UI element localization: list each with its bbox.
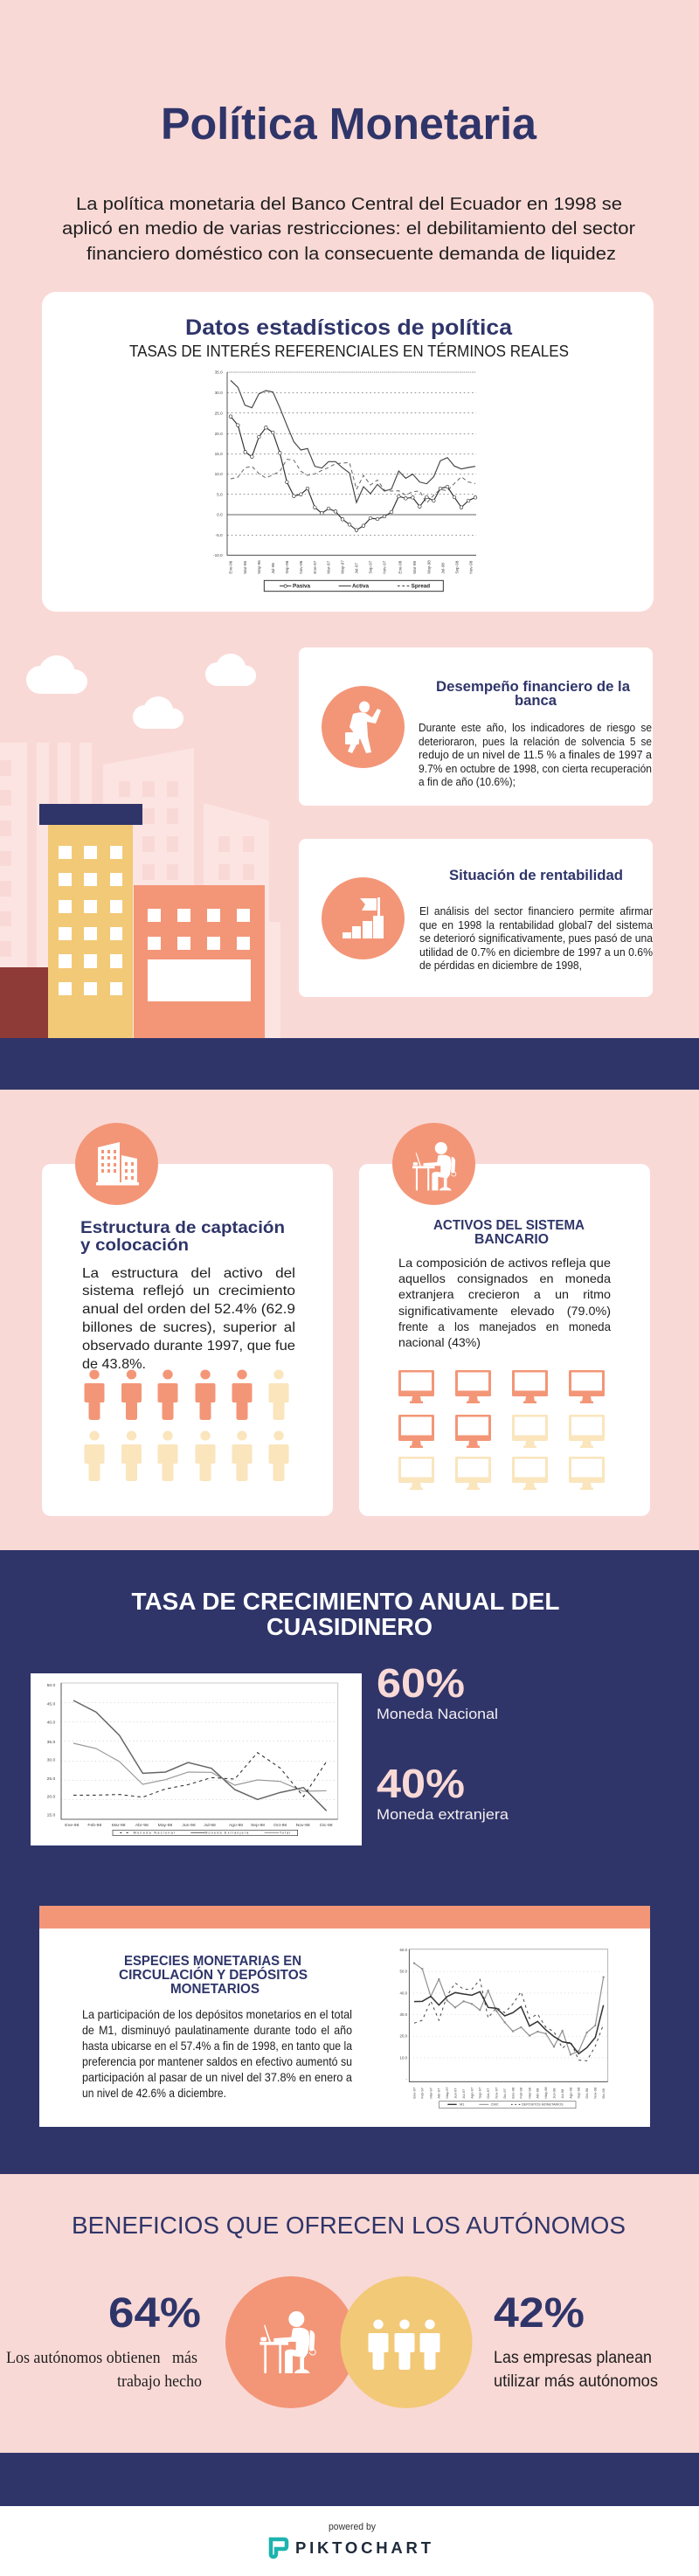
section: navy background — [0, 1550, 699, 2174]
heading: desempeño: banca — [515, 693, 557, 709]
text: estructura: La estructura del activo del — [82, 1266, 295, 1281]
footer: powered by piktochart: PIKTOCHART — [295, 2538, 432, 2557]
line chart: cuasidinero: Moneda Extranjera — [204, 1832, 249, 1835]
text: activos: significativamente elevado (79.0%) — [398, 1304, 611, 1318]
line chart: especies monetarias: 30.0 — [400, 2012, 408, 2017]
subheading: tasas de interés: TASAS DE INTERÉS REFERENCIALES EN TÉRMINOS REALES — [129, 343, 569, 360]
heading: especies monetarias: ESPECIES MONETARIAS EN — [124, 1954, 301, 1969]
text: desempeño: deterioraron, pues la relación de solvencia 5 se — [419, 735, 652, 748]
line chart: cuasidinero: Sep-98 — [251, 1823, 265, 1828]
stat: 64%: Los autónomos obtienen más — [6, 2349, 197, 2367]
panel: estructura de captación — [42, 1123, 333, 1516]
line chart: especies monetarias — [400, 1948, 608, 2109]
text: estructura: de 43.8%. — [82, 1357, 146, 1372]
heading: datos estadísticos: Datos estadísticos de política — [185, 315, 513, 340]
heading: tasa de crecimiento: CUASIDINERO — [266, 1613, 433, 1640]
heading: especies monetarias — [119, 1954, 308, 1997]
line chart: especies monetarias: Feb-97 — [420, 2087, 425, 2099]
heading: activos: BANCARIO — [474, 1232, 549, 1247]
text: estructura: anual del orden del 52.4% (62.9 — [82, 1302, 295, 1317]
icon: yellow circle with people — [341, 2276, 472, 2408]
line chart: tasas de interés: 20.0 — [215, 432, 223, 436]
line chart: tasas de interés: Nov-97 — [383, 560, 387, 574]
intro paragraph — [62, 194, 635, 264]
line chart: tasas de interés: -10.0 — [213, 553, 223, 557]
panel: activos del sistema bancario — [359, 1123, 650, 1516]
line chart: cuasidinero: 25.0 — [47, 1776, 56, 1782]
background buildings — [0, 743, 280, 1038]
line chart: especies monetarias: Abr-98 — [536, 2088, 540, 2099]
text: situación: utilidad de 0.7% en diciembre de 1997 a un 0.6% — [419, 945, 653, 959]
text: situación: se deterioró significativamente, pues pasó de una — [419, 931, 654, 945]
line chart: cuasidinero: Oct-98 — [273, 1823, 287, 1828]
stat: 40% moneda extranjera: 40% — [377, 1761, 465, 1806]
line chart: cuasidinero: May-98 — [158, 1823, 173, 1828]
title: Política Monetaria — [161, 99, 537, 149]
line chart: tasas de interés: May-96 — [257, 560, 261, 574]
line chart: especies monetarias: Ago-98 — [568, 2087, 572, 2099]
footer: powered by piktochart: powered by — [329, 2522, 376, 2532]
heading: estructura — [80, 1218, 285, 1255]
text: especies monetarias: preferencia por mantener saldos en efectivo aumentó su — [82, 2054, 352, 2068]
line chart: tasas de interés: 35.0 — [215, 370, 223, 375]
illustration: city skyline — [0, 654, 280, 1038]
line chart: especies monetarias: 20.0 — [400, 2034, 408, 2039]
line chart: cuasidinero: 15.0 — [47, 1813, 56, 1818]
line chart: cuasidinero: Ago-98 — [229, 1823, 243, 1828]
text: desempeño: a fin de año (10.6%); — [419, 775, 516, 788]
dark red building — [0, 967, 48, 1038]
pictogram: people — [84, 1370, 288, 1481]
line chart: tasas de interés: Jul-97 — [355, 563, 359, 574]
line chart: especies monetarias: Jul-98 — [560, 2088, 564, 2099]
line chart: tasas de interés: Nov-98 — [469, 560, 474, 574]
icon: office buildings — [75, 1123, 158, 1205]
line chart: cuasidinero: 40.0 — [47, 1720, 56, 1725]
text: especies monetarias — [82, 2007, 352, 2100]
line chart: especies monetarias: Ago-97 — [469, 2087, 474, 2099]
line chart: tasas de interés: Activa — [352, 584, 369, 590]
line chart: cuasidinero: 30.0 — [47, 1757, 56, 1762]
line chart: cuasidinero: Dic-98 — [320, 1823, 333, 1828]
heading: beneficios: BENEFICIOS QUE OFRECEN LOS AUTÓNOMOS — [72, 2212, 626, 2239]
text: situación — [419, 904, 654, 972]
panel: desempeño financiero — [299, 647, 653, 806]
line chart: especies monetarias: Sep-98 — [577, 2087, 581, 2099]
line chart: tasas de interés: 25.0 — [215, 411, 223, 415]
line chart: especies monetarias: Feb-98 — [519, 2087, 523, 2099]
line chart: cuasidinero: 20.0 — [47, 1795, 56, 1800]
stat: 60% moneda nacional — [377, 1660, 498, 1722]
line chart: cuasidinero: Moneda Nacional — [134, 1832, 175, 1835]
text: situación: que en 1998 la rentabilidad global7 del sistema — [419, 918, 654, 931]
icon: salmon circle with person at desk — [225, 2276, 356, 2408]
icon: piktochart logo — [271, 2539, 287, 2557]
line chart: especies monetarias: Nov-97 — [495, 2087, 499, 2099]
line chart: especies monetarias: Sep-97 — [478, 2087, 482, 2099]
stat: 64%: 64% — [108, 2290, 201, 2337]
line chart: especies monetarias: Mar-98 — [527, 2087, 531, 2099]
line chart: tasas de interés: Jul-98 — [440, 563, 445, 574]
line chart: tasas de interés: 15.0 — [215, 452, 223, 456]
line chart: tasas de interés: Mar-97 — [327, 561, 331, 574]
line chart: especies monetarias: Abr-97 — [437, 2088, 441, 2099]
text: especies monetarias: hasta ubicarse en el 57.4% a fin de 1998, en tanto que la — [82, 2039, 352, 2053]
heading: especies monetarias: CIRCULACIÓN Y DEPÓSITOS — [119, 1966, 308, 1983]
text: especies monetarias: de M1, disminuyó paulatinamente durante todo el año — [82, 2023, 352, 2037]
stat: 42%: 42% — [494, 2290, 585, 2337]
line chart: tasas de interés: Ene-96 — [229, 560, 233, 574]
stat: 64%: trabajo hecho — [117, 2372, 202, 2391]
text: activos: frente a los manejados en moneda — [398, 1319, 611, 1333]
line chart: especies monetarias: Jul-97 — [461, 2088, 466, 2099]
line chart: cuasidinero: Feb-98 — [87, 1823, 101, 1828]
clouds — [26, 654, 256, 729]
stat: 42% — [494, 2290, 658, 2391]
heading: estructura: Estructura de captación — [80, 1218, 285, 1237]
line chart: cuasidinero: Nov-98 — [296, 1823, 310, 1828]
text: estructura: sistema reflejó un crecimiento — [82, 1284, 295, 1298]
panel header strip — [39, 1906, 650, 1929]
panel: especies monetarias — [39, 1906, 650, 2127]
line chart: especies monetarias: 40.0 — [400, 1991, 408, 1995]
heading: tasa de crecimiento — [131, 1588, 559, 1640]
line chart: especies monetarias: - — [406, 2077, 408, 2081]
heading: estructura: y colocación — [80, 1236, 189, 1255]
stat: 40% moneda extranjera — [377, 1761, 509, 1823]
text: especies monetarias: un nivel de 42.6% a diciembre. — [82, 2086, 226, 2100]
text: estructura: observado durante 1997, que fue — [82, 1339, 295, 1354]
text: situación: de pérdidas en diciembre de 1998, — [419, 959, 582, 972]
text: situación: El análisis del sector financiero permite afirmar — [419, 904, 654, 918]
heading: situación: Situación de rentabilidad — [449, 868, 623, 883]
text: estructura: billones de sucres), superior al — [82, 1320, 295, 1335]
text: activos: nacional (43%) — [398, 1335, 481, 1349]
line chart: tasas de interés: Sep-98 — [454, 560, 459, 574]
panel: datos estadísticos — [42, 292, 654, 612]
text: desempeño: 9.7% en octubre de 1998, con cierta recuperación — [419, 762, 652, 775]
heading: tasa de crecimiento: TASA DE CRECIMIENTO ANUAL DEL — [131, 1588, 559, 1615]
text: desempeño: Durante este año, los indicadores de riesgo se — [419, 721, 652, 734]
line chart: tasas de interés: Sep-96 — [285, 560, 289, 574]
line chart: especies monetarias: Mar-97 — [428, 2087, 433, 2099]
text: estructura — [82, 1266, 295, 1372]
line chart: cuasidinero: Ene-98 — [65, 1823, 80, 1828]
intro paragraph: aplicó en medio de varias restricciones: el debilitamiento del sector — [62, 218, 635, 239]
pictogram: monitors — [398, 1370, 605, 1490]
salmon building — [134, 885, 265, 1038]
line chart: especies monetarias: Jun-98 — [551, 2088, 556, 2099]
text: desempeño — [419, 721, 653, 788]
line chart: tasas de interés: May-98 — [426, 560, 431, 574]
line chart: tasas de interés: Pasiva — [293, 584, 311, 590]
navy band — [0, 1038, 699, 1090]
text: activos: extranjera crecieron a un ritmo — [398, 1287, 611, 1301]
line chart: tasas de interés: Nov-96 — [299, 560, 303, 574]
icon: person at desk — [392, 1123, 475, 1205]
icon: walking businessman — [322, 686, 405, 768]
line chart: cuasidinero: Jul-98 — [204, 1823, 216, 1828]
icon: bars and flag — [322, 877, 405, 959]
heading: activos: ACTIVOS DEL SISTEMA — [433, 1218, 585, 1233]
line chart: especies monetarias: Oct-98 — [585, 2088, 589, 2099]
line chart: especies monetarias: Jun-97 — [453, 2088, 457, 2099]
line chart: especies monetarias: 60.0 — [400, 1948, 408, 1952]
line chart: cuasidinero: 50.0 — [47, 1683, 56, 1688]
line chart: tasas de interés: 0.0 — [217, 513, 223, 517]
line chart: especies monetarias: Ene-98 — [510, 2087, 515, 2099]
line chart: tasas de interés: Ene-98 — [398, 560, 403, 574]
line chart: especies monetarias: May-98 — [543, 2087, 548, 2099]
line chart: tasas de interés — [213, 370, 476, 592]
line chart: tasas de interés: Ene-97 — [313, 560, 317, 574]
line chart: especies monetarias: M1 — [460, 2102, 465, 2107]
line chart: especies monetarias: Dic-97 — [502, 2088, 507, 2099]
line chart: tasas de interés: 30.0 — [215, 391, 223, 395]
text: desempeño: redujo de un nivel de 11.5 % a finales de 1997 a — [419, 748, 653, 761]
stat: 64% — [6, 2290, 202, 2391]
intro paragraph: La política monetaria del Banco Central del Ecuador en 1998 se — [76, 194, 622, 214]
heading: desempeño: Desempeño financiero de la — [436, 679, 631, 695]
line chart: tasas de interés: -5.0 — [216, 533, 223, 537]
stat: 42%: utilizar más autónomos — [494, 2372, 658, 2391]
panel: situación de rentabilidad — [299, 839, 654, 997]
line chart: especies monetarias: Dic-98 — [601, 2088, 606, 2099]
line chart: tasas de interés: Jul-96 — [271, 563, 275, 574]
text: activos: La composición de activos refleja que — [398, 1256, 611, 1270]
line chart: tasas de interés: 10.0 — [215, 472, 223, 476]
line chart: cuasidinero: 45.0 — [47, 1701, 56, 1707]
stat: 60% moneda nacional: Moneda Nacional — [377, 1706, 498, 1722]
line chart: tasas de interés: Mar-96 — [243, 561, 247, 574]
heading: especies monetarias: MONETARIOS — [170, 1982, 260, 1997]
line chart: tasas de interés: Spread — [412, 584, 430, 590]
text: especies monetarias: La participación de los depósitos monetarios en el total — [82, 2007, 352, 2021]
text: activos — [398, 1256, 611, 1349]
line chart: especies monetarias: Oct-97 — [486, 2088, 490, 2099]
text: activos: aquellos consignados en moneda — [398, 1271, 611, 1285]
line chart: cuasidinero: Abr-98 — [135, 1823, 149, 1828]
stat: 40% moneda extranjera: Moneda extranjera — [377, 1806, 509, 1823]
intro paragraph: financiero doméstico con la consecuente demanda de liquidez — [87, 244, 616, 264]
line chart: tasas de interés: Mar-98 — [412, 561, 417, 574]
navy footer band — [0, 2453, 699, 2506]
line chart: especies monetarias: DEPOSITOS MONETARIOS — [522, 2102, 564, 2107]
line chart: tasas de interés: 5.0 — [217, 492, 223, 496]
line chart: tasas de interés: Sep-97 — [369, 560, 373, 574]
heading: activos — [433, 1218, 585, 1247]
line chart: especies monetarias: Nov-98 — [593, 2087, 598, 2099]
yellow tower — [39, 804, 142, 1038]
line chart: especies monetarias: 10.0 — [400, 2055, 408, 2060]
line chart: cuasidinero: Total — [280, 1832, 290, 1835]
line chart: especies monetarias: May-97 — [445, 2087, 449, 2099]
line chart: especies monetarias: Ene-97 — [412, 2087, 416, 2099]
footer: powered by piktochart — [0, 2506, 699, 2576]
line chart: cuasidinero — [31, 1673, 362, 1845]
line chart: especies monetarias: CMC — [491, 2102, 499, 2107]
heading: desempeño — [436, 679, 631, 709]
line chart: especies monetarias: 50.0 — [400, 1970, 408, 1974]
line chart: cuasidinero: Jun-98 — [182, 1823, 196, 1828]
line chart: cuasidinero: Mar-98 — [112, 1823, 126, 1828]
line chart: tasas de interés: May-97 — [341, 560, 345, 574]
stat: 42%: Las empresas planean — [494, 2349, 652, 2367]
line chart: cuasidinero: 35.0 — [47, 1740, 56, 1745]
text: especies monetarias: participación al pasar de un nivel del 37.8% en enero a — [82, 2070, 352, 2084]
stat: 60% moneda nacional: 60% — [377, 1660, 465, 1706]
